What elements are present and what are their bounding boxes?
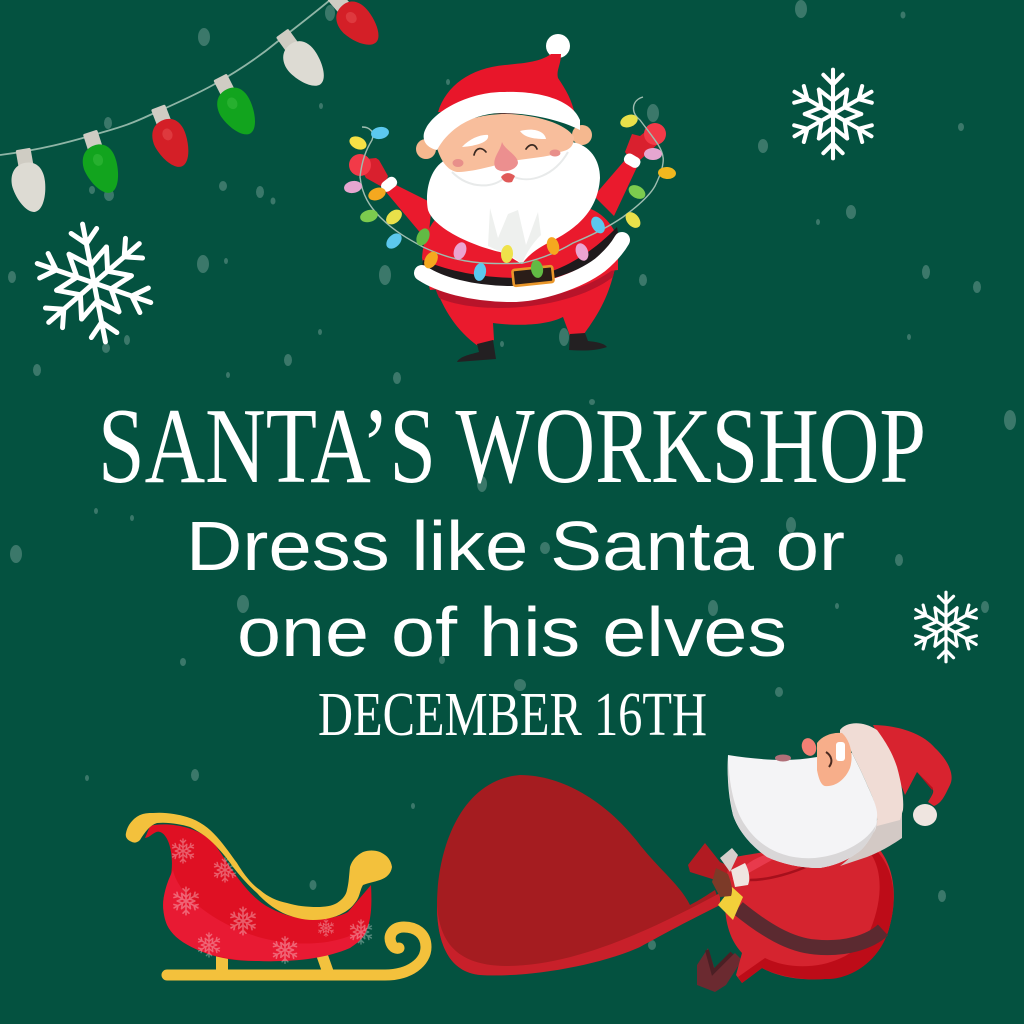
mini bulbs (343, 112, 676, 282)
sleigh struts (216, 955, 334, 972)
eyebrow (836, 742, 845, 761)
wire of colored lights (360, 97, 663, 264)
beard (427, 142, 600, 264)
santa holding lights (343, 34, 676, 362)
hat pompom (546, 34, 570, 58)
hat pompom (913, 804, 937, 826)
light bulb: green (205, 70, 263, 142)
body (725, 846, 894, 983)
nose and mouth (494, 142, 518, 171)
sleigh gold rail (126, 813, 392, 920)
string of holiday lights (0, 0, 387, 215)
cuffs (720, 848, 738, 872)
nose (799, 736, 819, 758)
hat brim (424, 92, 580, 150)
sack (437, 775, 720, 975)
snowflake: lower right (910, 592, 982, 662)
hat (873, 725, 952, 806)
light bulb: white (6, 146, 50, 215)
lower collar (840, 813, 902, 866)
arms (386, 160, 637, 242)
snowflake: left (22, 212, 166, 354)
pants and legs (435, 268, 615, 346)
buckle (512, 266, 554, 286)
date: DECEMBER 16TH (318, 681, 707, 749)
sleigh (126, 813, 426, 975)
boot (697, 948, 742, 992)
eye (826, 752, 831, 767)
eyebrows (462, 135, 488, 147)
sleigh snowflake pattern (171, 839, 373, 963)
moustache shading (452, 152, 568, 185)
light bulb: red (320, 0, 387, 55)
subheading line one: Dress like Santa or (186, 507, 845, 585)
hat (438, 54, 575, 115)
light bulb: green (74, 127, 125, 198)
sack tail (688, 843, 733, 883)
face (436, 114, 574, 172)
rope knot (712, 868, 732, 897)
light bulb: white (268, 24, 333, 95)
arm line and lighter sleeve (732, 850, 790, 880)
face (817, 733, 852, 786)
torso (422, 205, 618, 290)
beard (728, 753, 877, 868)
sleigh body (145, 824, 371, 961)
cuffs (379, 175, 399, 194)
snowflake: top right (788, 70, 878, 158)
mouth (775, 754, 791, 762)
subheading line two: one of his elves (237, 593, 787, 671)
smiling eyes (474, 145, 537, 155)
light bulb: red (142, 101, 196, 173)
belt fur trim (422, 240, 622, 294)
mittens (356, 158, 388, 188)
belt (420, 227, 620, 290)
cheeks (452, 159, 464, 167)
belt (738, 908, 883, 948)
santa pulling sack (688, 723, 952, 992)
hat band (840, 723, 903, 826)
boots (457, 340, 496, 362)
bell (718, 887, 743, 920)
sleigh runner (167, 927, 426, 975)
ears (416, 139, 436, 159)
